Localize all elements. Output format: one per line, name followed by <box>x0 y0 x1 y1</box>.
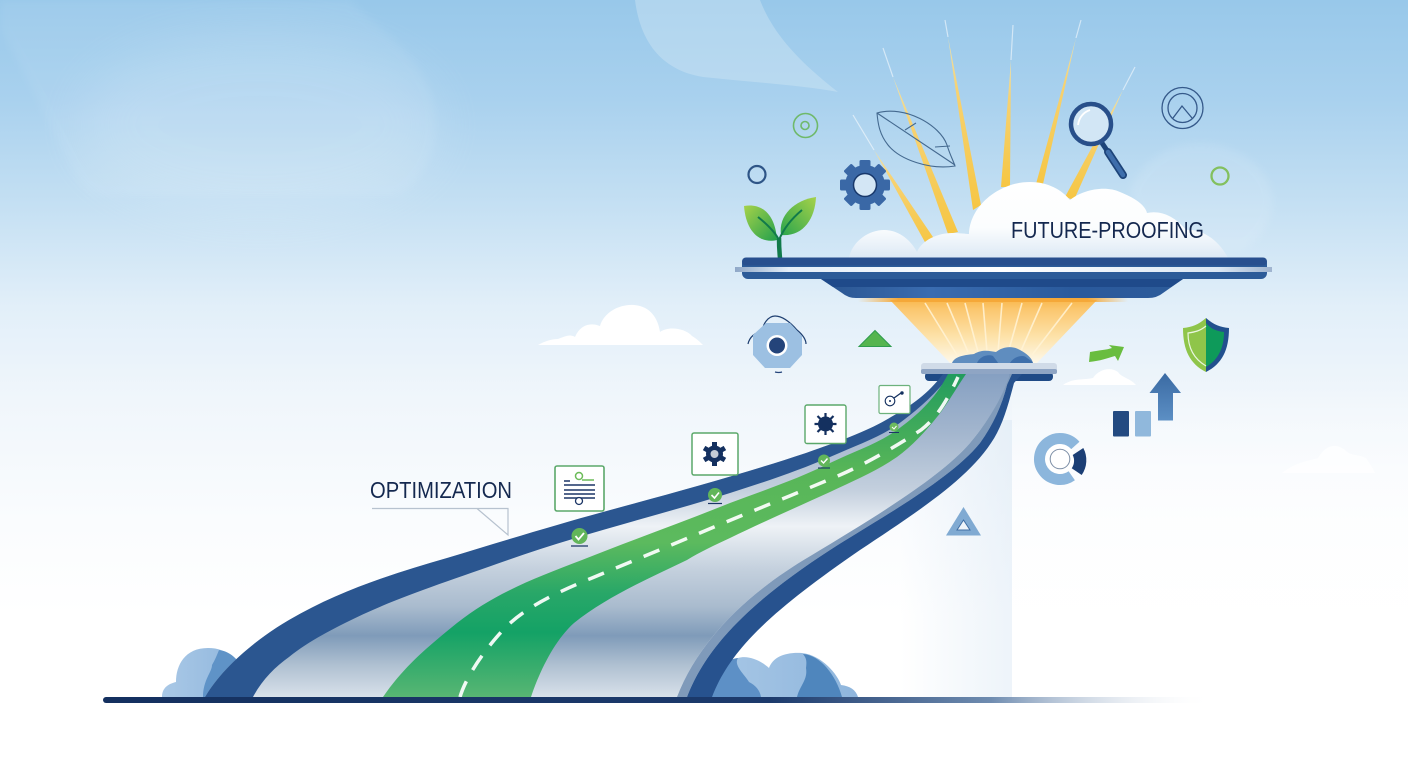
step check 2 <box>708 488 722 504</box>
background cloud far right <box>1282 446 1375 473</box>
icon: blue triangle <box>946 507 981 536</box>
bushes right <box>700 653 858 697</box>
icon: sky ring green <box>794 114 818 138</box>
road right edge band <box>677 374 1022 697</box>
heading: optimization: OPTIMIZATION <box>370 477 512 503</box>
road green lane <box>383 374 966 697</box>
ground line <box>103 697 1213 703</box>
callout pointer <box>372 508 508 535</box>
small platform deck <box>921 363 1057 374</box>
icon: gear <box>840 160 890 210</box>
road center dashes <box>460 377 958 697</box>
icon: green arrow <box>1089 345 1124 362</box>
icon: blob with lens <box>748 316 806 372</box>
icon: small green ring <box>1212 168 1228 184</box>
road left edge band <box>205 374 951 697</box>
icon: magnifying glass <box>1071 104 1123 175</box>
step box 4: key <box>879 386 910 414</box>
step box 2: gear <box>692 433 738 475</box>
light funnel <box>858 298 1128 363</box>
bar chart with rising arrow <box>1113 373 1181 436</box>
icon: green triangle <box>859 330 891 346</box>
step box 3: virus gear <box>805 405 846 444</box>
sun rays <box>853 20 1135 244</box>
icon: leaf outline <box>877 111 955 167</box>
icon: ring with chevron <box>1162 88 1203 128</box>
step box 1: document <box>555 466 604 511</box>
main platform <box>735 258 1272 298</box>
road surface <box>205 374 1010 697</box>
step check 4 <box>889 422 899 432</box>
main cloud <box>849 182 1228 258</box>
background cloud left <box>538 305 703 345</box>
small platform underside <box>925 372 1053 381</box>
icon: small dark ring <box>748 166 766 183</box>
icon: donut chart <box>1031 430 1089 488</box>
icon: shield <box>1183 318 1229 372</box>
icon: sprout <box>744 197 816 258</box>
background cloud right <box>1063 369 1136 385</box>
heading: future-proofing: FUTURE-PROOFING <box>1011 217 1204 243</box>
small platform cloud <box>952 347 1033 363</box>
step check 3 <box>818 454 830 468</box>
bushes left <box>162 648 248 697</box>
step check 1 <box>571 528 588 546</box>
